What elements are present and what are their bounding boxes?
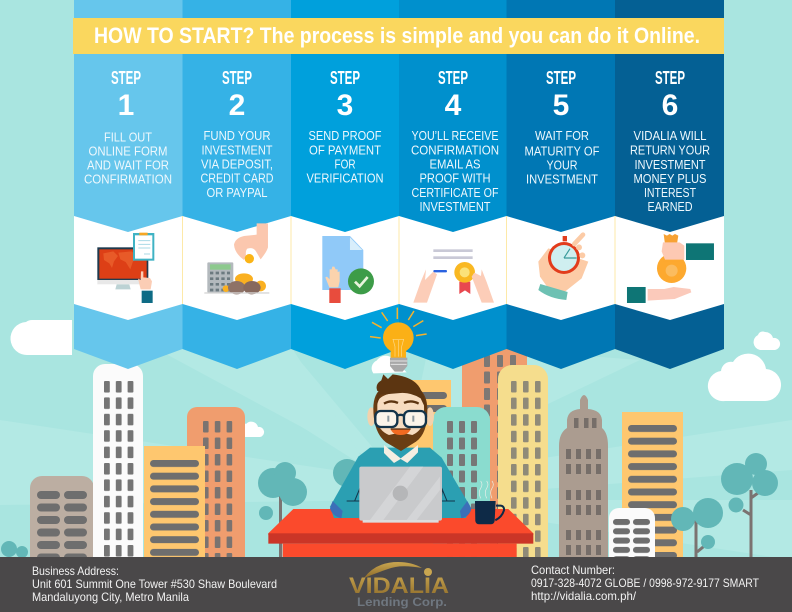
building: tan [30,476,94,576]
step 6 text: EARNED [648,200,692,214]
step 3 text: 3 [337,89,353,122]
sleeve folds [347,490,455,501]
step 4 text: STEP [438,68,468,88]
city: center buildings [400,345,548,570]
building: small white [609,508,655,578]
building: pale yellow [498,365,548,570]
building: orange left [187,407,245,567]
step 6 text [630,68,710,214]
step 2 text: CREDIT CARD [200,172,274,186]
step 4 text: YOU’LL RECEIVE [412,129,498,143]
cloud: right large [708,354,781,401]
hair [377,374,427,411]
step 2 text: INVESTMENT [202,144,273,158]
step 1 text: AND WAIT FOR [87,158,169,172]
step 1 text: 1 [118,89,134,122]
cloud: near orange building [237,422,264,437]
eyebrows [384,401,419,404]
step 3 text: OF PAYMENT [309,144,381,158]
step 3 text: VERIFICATION [306,172,384,186]
goatee [393,439,409,450]
step 1 text: FILL OUT [104,130,152,144]
contact details: Contact Number: [531,563,615,577]
building: teal [433,407,490,567]
step 2 text: VIA DEPOSIT, [201,158,273,172]
building: grey tower [559,395,608,557]
city: right buildings [559,395,778,578]
step 2 text [200,68,274,200]
building: white tower [93,364,143,574]
business address: Mandaluyong City, Metro Manila [32,590,189,604]
cloud: right small [754,331,780,350]
glasses [375,411,426,427]
step 6 text: STEP [655,68,685,88]
icon: hand holding stopwatch [538,235,588,300]
step 1 text [84,68,172,186]
laptop [359,467,442,523]
step 4 text: CERTIFICATE OF [412,186,499,200]
city: left buildings [30,364,245,576]
shirt [330,448,470,518]
sleeve cuffs [330,501,471,518]
column 2 background [182,0,291,369]
icon: coin, calculator and purse [204,223,269,294]
coffee mug [475,481,504,524]
step 5 text: YOUR [546,158,578,172]
step 6 text: INVESTMENT [634,158,706,172]
contact details: 0917-328-4072 GLOBE / 0998-972-9177 SMART [531,576,760,590]
contact details: http://vidalia.com.ph/ [531,589,637,603]
step 6 text: VIDALIA WILL [634,129,707,143]
step 1 text: STEP [111,68,141,88]
step 5 text: WAIT FOR [535,129,589,143]
step 6 text: 6 [662,89,678,122]
ears [367,407,434,426]
business address: Unit 601 Summit One Tower #530 Shaw Boulevard [32,577,277,591]
cloud: top left [10,320,72,355]
city: left trees [1,459,361,558]
step 2 text: STEP [222,68,252,88]
icon: light bulb [370,308,427,373]
building: yellow-orange right [622,412,683,557]
step 2 text: FUND YOUR [204,129,270,143]
step 6 text: MONEY PLUS [634,172,706,186]
business address: Business Address: [32,564,119,578]
mouth [391,429,411,435]
desk [268,509,533,557]
contact details [531,563,760,603]
building: yellow-orange [144,446,205,557]
clouds [10,320,781,437]
logo: Vidalia Lending Corp. [349,562,449,609]
white zigzag icon band [74,216,724,320]
icon: document, raised hand and check [322,236,374,303]
column 3 background [291,0,399,369]
step 2 text: 2 [229,89,245,122]
step 1 text: CONFIRMATION [84,172,172,186]
step 4 text: INVESTMENT [420,200,491,214]
step 5 text [524,68,600,186]
column 6 background [615,0,724,369]
step 4 text: CONFIRMATION [411,144,499,158]
step 5 text: 5 [553,89,569,122]
logo: Vidalia Lending Corp.: Lending Corp. [357,595,447,609]
step 4 text: EMAIL AS [430,158,480,172]
title banner: HOW TO START? The process is simple and you can do it Online. [94,23,700,48]
icon: certificate with hands [413,249,494,303]
building: yellow behind man [400,380,451,557]
step 4 text: PROOF WITH [420,172,490,186]
step 3 text: STEP [330,68,360,88]
business address [32,564,277,604]
step 1 text: ONLINE FORM [88,144,168,158]
title banner [73,18,724,54]
eyes [387,416,414,422]
step 4 text: 4 [445,89,462,122]
step 3 text [306,68,384,186]
column 1 background [74,0,182,369]
step 6 text: RETURN YOUR [630,144,710,158]
step 5 text: STEP [546,68,576,88]
beard and face [373,383,427,451]
step 6 text: INTEREST [644,186,696,200]
icon: money bag handover [627,234,714,303]
logo: Vidalia Lending Corp.: VIDALIA [349,573,449,598]
step 4 text [411,68,499,214]
column 4 background [399,0,506,369]
column 5 background [506,0,615,369]
character: man at desk with laptop [268,308,533,557]
tree: right large [721,453,778,557]
collar [384,445,418,463]
step columns [74,0,724,369]
step 3 text: SEND PROOF [308,129,382,143]
tree: right small [671,498,723,557]
step 5 text: MATURITY OF [524,144,600,158]
footer bar [0,557,792,612]
icon: computer, clipboard and hand [97,233,154,303]
step 5 text: INVESTMENT [526,172,598,186]
step 3 text: FOR [334,158,356,172]
step 2 text: OR PAYPAL [206,186,268,200]
building: orange center [462,345,527,557]
